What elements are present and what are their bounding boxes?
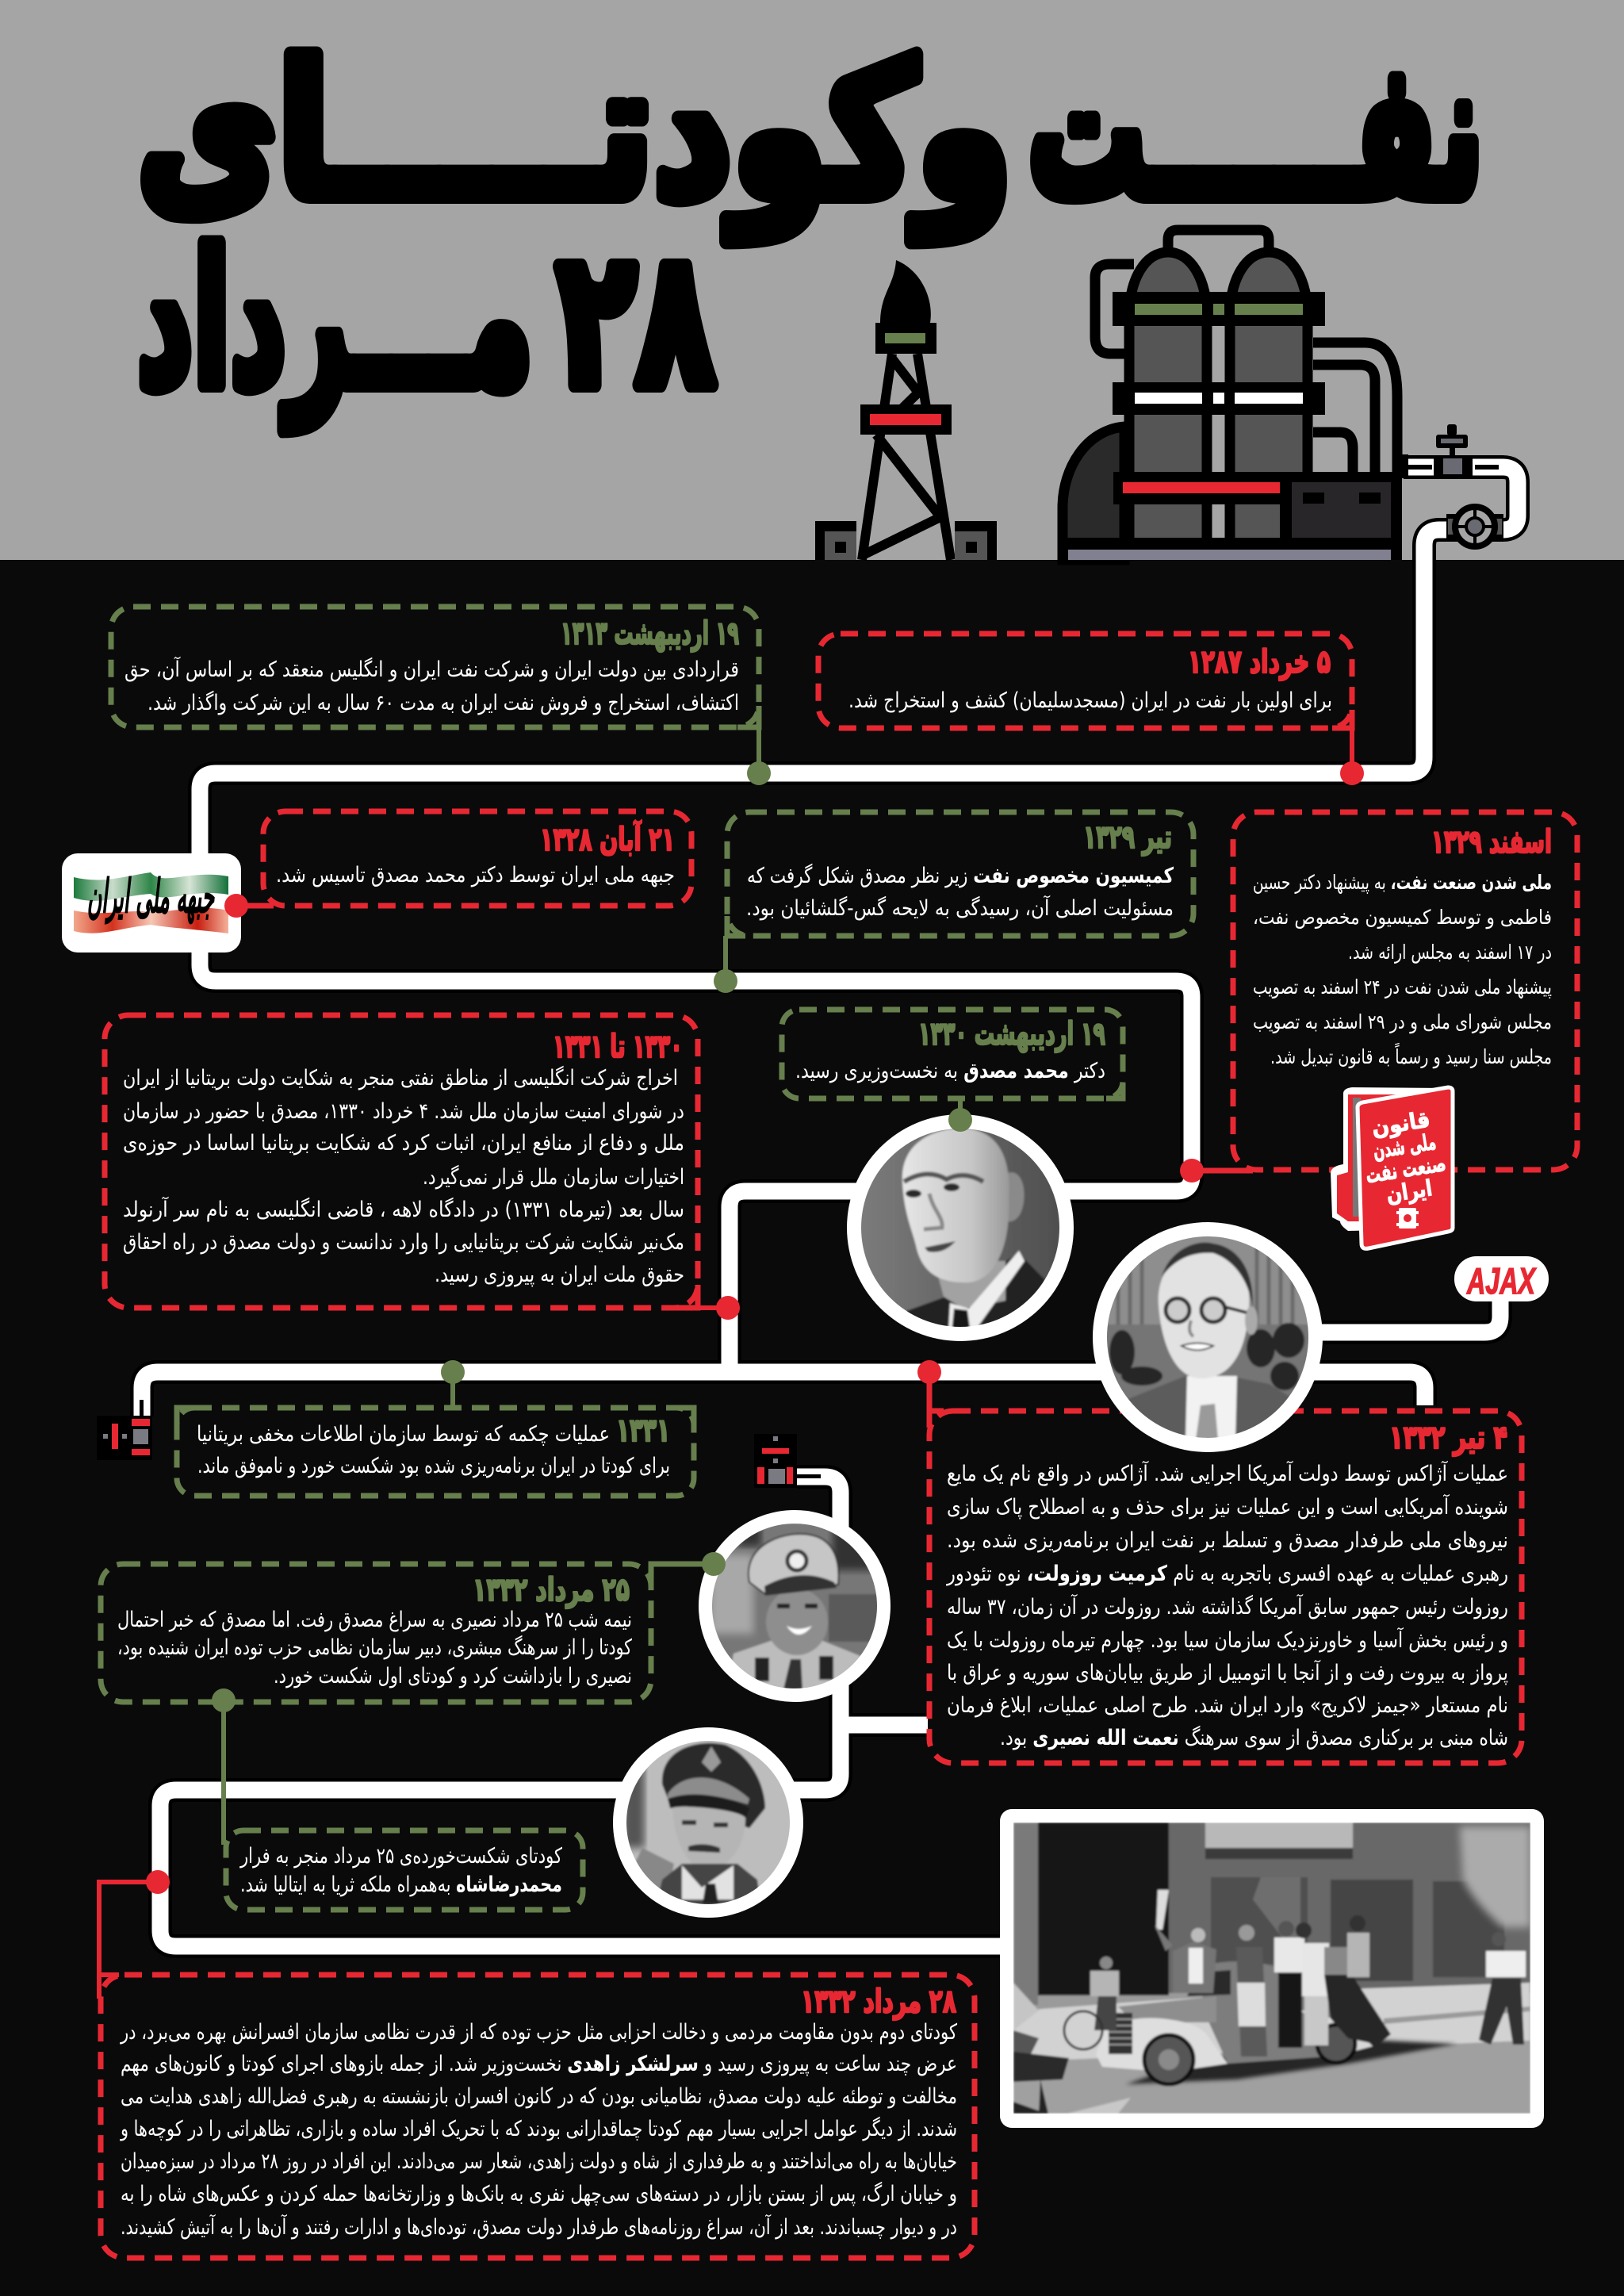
- panel: 1313 agreement: ۱۹ اردیبهشت ۱۳۱۳: [561, 615, 739, 652]
- panel: 4 tir 1332: روزولت رئیس جمهور سابق آمریکا گذاشته شد. روزولت در آن زمان، ۳۷ ساله: [947, 1594, 1508, 1619]
- icon: law book: قانون: [1369, 1106, 1432, 1141]
- panel: 25 mordad 1332: [101, 1564, 714, 1702]
- panel: 1328 national front: [236, 811, 691, 906]
- panel: 4 tir 1332: شاه مبنی بر برکناری مصدق از سوی سرهنگ نعمت الله نصیری بود.: [1000, 1725, 1508, 1750]
- panel: esfand 1329 nationalization: پیشنهاد ملی شدن نفت در ۲۴ اسفند به تصویب: [1253, 976, 1552, 999]
- panel: 1330 to 1331: حقوق ملت ایران به پیروزی رسید.: [435, 1263, 684, 1287]
- panel: 1330 to 1331: [105, 1015, 740, 1320]
- icon: law book: ایران: [1385, 1175, 1434, 1208]
- panel: 4 tir 1332: [917, 1360, 1522, 1763]
- portrait: Mossadegh: [847, 1114, 1074, 1341]
- panel: 1331 boot operation: عملیات چکمه که توسط سازمان اطلاعات مخفی بریتانیا: [197, 1422, 610, 1447]
- panel: 1331 boot operation: ۱۳۳۱: [616, 1412, 670, 1449]
- portrait: Shah: [613, 1727, 803, 1918]
- panel: 1329 tir commission: تیر ۱۳۲۹: [1083, 819, 1172, 856]
- panel: 4 tir 1332: و رئیس بخش آسیا و خاورنزدیک سازمان سیا بود. چهارم تیرماه روزولت با یک: [947, 1627, 1508, 1653]
- panel: 1313 agreement: قراردادی بین دولت ایران و شرکت نفت ایران و انگلیس منعقد که بر اساس آن، حق: [124, 657, 739, 682]
- panel: 1330 to 1331: ۱۳۳۰ تا ۱۳۳۱: [553, 1029, 683, 1065]
- icon: pipe valve wheel: [1446, 507, 1503, 546]
- panel: 1331 boot operation: [177, 1360, 694, 1496]
- panel: 25 mordad 1332: نصیری را بازداشت کرد و کودتای اول شکست خورد.: [274, 1664, 632, 1688]
- panel: 28 mordad 1332: مخالفت و توطئه علیه دولت مصدق، نظامیانی بودن که در کانون افسران بازنشسته به رهبری فضل‌الله زاهدی هدایت می: [121, 2084, 957, 2109]
- icon: law book: [1331, 1087, 1453, 1248]
- node: Mossadegh: [948, 1108, 972, 1132]
- logo: AJAX: AJAX: [1466, 1260, 1537, 1301]
- panel: esfand 1329 nationalization: در ۱۷ اسفند به مجلس ارائه شد.: [1348, 941, 1552, 964]
- panel: ordibehesht 1330 premiership: ۱۹ اردیبهشت ۱۳۳۰: [918, 1016, 1105, 1052]
- panel: 4 tir 1332: ۴ تیر ۱۳۳۲: [1389, 1420, 1507, 1456]
- panel: 1287 first oil: [818, 634, 1364, 785]
- logo: national front of Iran: جبهه ملی ایران: [87, 869, 215, 925]
- panel: 1313 agreement: [111, 607, 771, 785]
- icon: oil derrick: [815, 260, 997, 560]
- panel: 25 mordad 1332: نیمه شب ۲۵ مرداد نصیری به سراغ مصدق رفت. اما مصدق که خبر احتمال: [117, 1608, 632, 1632]
- panel: 1328 national front: جبهه ملی ایران توسط دکتر محمد مصدق تاسیس شد.: [276, 863, 675, 887]
- panel: 28 mordad 1332: و خیابان ارگ، پس از بستن بازار، در دسته‌های سی‌چهل نفری به بانک‌ها و وزارتخانه‌ها حمله کردن و عکس‌های شاه را به: [121, 2181, 957, 2206]
- panel: 4 tir 1332: رهبری عملیات به عهده افسری باتجربه به نام کرمیت روزولت، نوه تئودور: [945, 1562, 1508, 1586]
- panel: esfand 1329 nationalization: اسفند ۱۳۲۹: [1431, 824, 1552, 861]
- panel: 28 mordad 1332: در و دیوار چسباندند. بعد از آن، سراغ روزنامه‌های طرفدار دولت مصدق، توده‌ای‌ها و ادارات رفتند و آن‌ها را به آتیش کشیدند.: [121, 2214, 957, 2240]
- main pipeline: [140, 467, 1518, 1946]
- panel: 28 mordad 1332: عرض چند ساعت به پیروزی رسید و سرلشکر زاهدی نخست‌وزیر شد. از جمله بازوهای اجرای کودتا و کانون‌های مهم: [121, 2052, 957, 2076]
- panel: 1328 national front: ۲۱ آبان ۱۳۲۸: [540, 819, 675, 858]
- portrait: Nasiri: [699, 1510, 891, 1702]
- panel: 28 mordad 1332: [99, 1870, 975, 2258]
- title: [137, 24, 1484, 431]
- icon: law book: صنعت نفت: [1364, 1150, 1448, 1189]
- panel: 28 mordad 1332: ۲۸ مرداد ۱۳۳۲: [801, 1984, 956, 2020]
- panel: ordibehesht 1330 premiership: [782, 1010, 1123, 1120]
- panel: esfand 1329 nationalization: ملی شدن صنعت نفت، به پیشنهاد دکتر حسین: [1253, 871, 1552, 895]
- panel: esfand 1329 nationalization: [1180, 812, 1577, 1182]
- icon: upper pipe valve: [754, 1434, 797, 1488]
- panel: shah flight: محمدرضاشاه به‌همراه ملکه ثریا به ایتالیا شد.: [240, 1872, 562, 1897]
- panel: shah flight: [212, 1688, 583, 1910]
- panel: 4 tir 1332: نام مستعار «جیمز لاکریج» وارد ایران شد. طرح اصلی عملیات، ابلاغ فرمان: [947, 1693, 1508, 1718]
- header: grey band: [0, 0, 1624, 560]
- portrait: Roosevelt: [1093, 1222, 1323, 1452]
- logo: AJAX: [1454, 1256, 1549, 1301]
- title: مـــرداد: [137, 213, 533, 431]
- panel: 1330 to 1331: ملل و دفاع از منافع ایران، اثبات کرد که شکایت بریتانیا اساسا در حوزه‌ی: [123, 1131, 684, 1156]
- panel: 1287 first oil: ۵ خرداد ۱۲۸۷: [1188, 644, 1331, 680]
- panel: 1329 tir commission: مسئولیت اصلی آن، رسیدگی به لایحه گس-گلشائیان بود.: [746, 895, 1174, 921]
- panel: 4 tir 1332: پرواز به بیروت رفت و از آنجا با اتومبیل از طریق بیابان‌های سوریه و عراق با: [947, 1660, 1508, 1685]
- panel: 4 tir 1332: عملیات آژاکس توسط دولت آمریکا اجرایی شد. آژاکس در واقع نام یک مایع: [947, 1461, 1508, 1486]
- panel: shah flight: کودتای شکست‌خورده‌ی ۲۵ مرداد منجر به فرار: [239, 1844, 562, 1869]
- panel: 4 tir 1332: نیروهای ملی طرفدار مصدق و تسلط بر نفت ایران برنامه‌ریزی شده بود.: [947, 1528, 1508, 1553]
- panel: 1330 to 1331: سال بعد (تیرماه ۱۳۳۱) در دادگاه لاهه ، قاضی انگلیسی به نام سر آرنولد: [123, 1197, 684, 1222]
- panel: esfand 1329 nationalization: فاطمی و توسط کمیسیون مخصوص نفت،: [1253, 906, 1552, 930]
- panel: 4 tir 1332: شوینده آمریکایی است و این عملیات نیز برای حذف و به اصطلاح پاک سازی: [947, 1494, 1508, 1520]
- panel: esfand 1329 nationalization: مجلس شورای ملی و در ۲۹ اسفند به تصویب: [1253, 1010, 1552, 1034]
- photo: crowd on car, 28 mordad: [1000, 1809, 1544, 2128]
- panel: 1329 tir commission: [714, 812, 1193, 993]
- logo: national front of Iran: [62, 853, 241, 953]
- panel: 28 mordad 1332: خیابان‌ها به راه می‌انداختند و به طرفداری از شاه و دولت زاهدی، شعار سر می‌دادند. این افراد در روز ۲۸ مرداد در سبزه‌میدان: [121, 2149, 957, 2174]
- node: national front: [224, 894, 248, 918]
- icon: refinery towers: [1058, 230, 1402, 560]
- title: ۲۸: [557, 213, 715, 429]
- icon: pipe valve top: [1399, 424, 1499, 478]
- panel: 1331 boot operation: برای کودتا در ایران برنامه‌ریزی شده بود شکست خورد و ناموفق ماند.: [197, 1454, 670, 1478]
- node: Nasiri: [702, 1552, 726, 1576]
- panel: 1287 first oil: برای اولین بار نفت در ایران (مسجدسلیمان) کشف و استخراج شد.: [848, 688, 1332, 713]
- panel: 1330 to 1331: اخراج شرکت انگلیسی از مناطق نفتی منجر به شکایت دولت بریتانیا از ایران: [123, 1065, 678, 1091]
- panel: 1313 agreement: اکتشاف، استخراج و فروش نفت ایران به مدت ۶۰ سال به این شرکت واگذار شد.: [147, 690, 739, 715]
- panel: 1329 tir commission: کمیسیون مخصوص نفت زیر نظر مصدق شکل گرفت که: [747, 863, 1174, 888]
- panel: 25 mordad 1332: ۲۵ مرداد ۱۳۳۲: [473, 1572, 630, 1608]
- icon: law book: ملی شدن: [1371, 1129, 1438, 1164]
- icon: left pipe valve: [97, 1416, 152, 1460]
- panel: 1330 to 1331: در شورای امنیت سازمان ملل شد. ۴ خرداد ۱۳۳۰، مصدق با حضور در سازمان: [123, 1099, 684, 1124]
- panel: 28 mordad 1332: کودتای دوم بدون مقاومت مردمی و دخالت احزابی مثل حزب توده که از قدرت نظامی سازمان افسرانش بهره می‌برد، در: [119, 2020, 957, 2045]
- title: وکودتـــــای: [137, 24, 1012, 242]
- panel: 1330 to 1331: مک‌نیر شکایت شرکت بریتانیایی را وارد ندانست و دولت مصدق در راه احقاق: [123, 1230, 684, 1255]
- panel: ordibehesht 1330 premiership: دکتر محمد مصدق به نخست‌وزیری رسید.: [795, 1059, 1105, 1083]
- panel: 25 mordad 1332: کودتا را از سرهنگ مبشری، دبیر سازمان نظامی حزب توده ایران شنیده بود،: [117, 1635, 632, 1660]
- panel: 28 mordad 1332: شدند. از دیگر عوامل اجرایی بسیار مهم کودتا چماقدارانی بودند که با تحریک افراد ساده و بازاری، تظاهراتی را در کوچه‌ها و: [119, 2116, 957, 2141]
- panel: 1330 to 1331: اختیارات سازمان ملل قرار نمی‌گیرد.: [423, 1164, 684, 1190]
